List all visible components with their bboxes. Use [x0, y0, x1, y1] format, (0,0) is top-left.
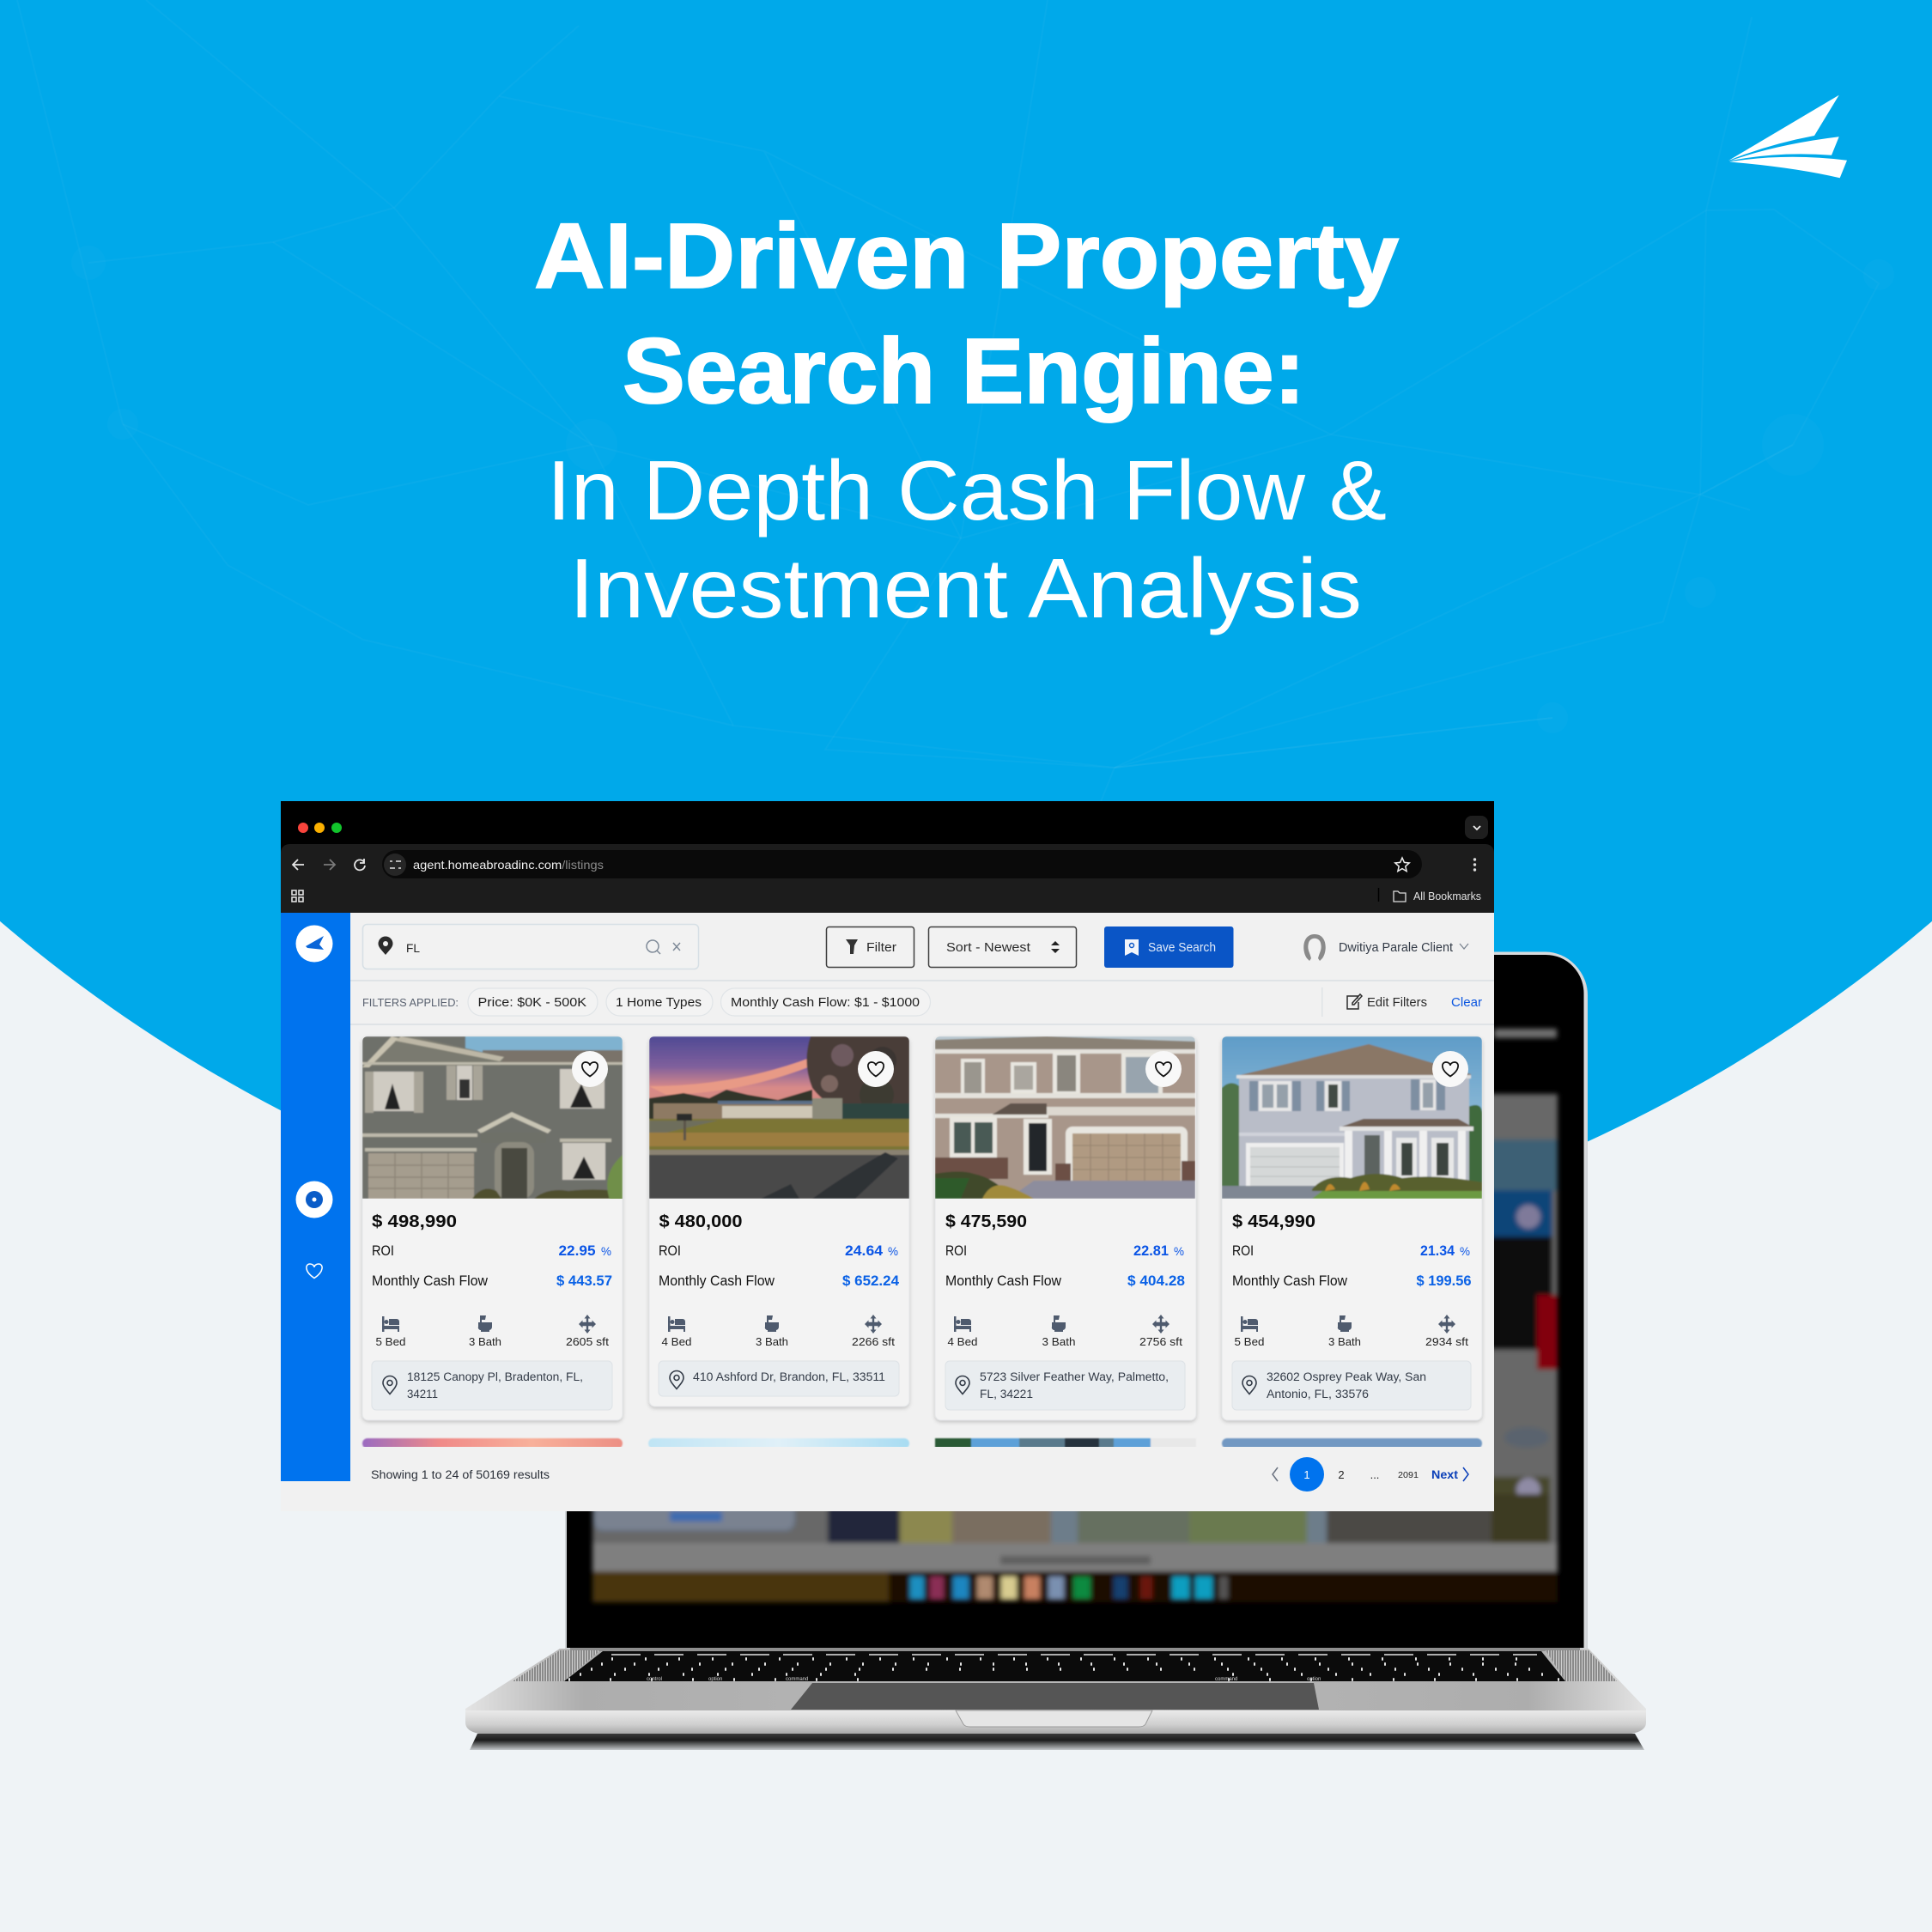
tab dropdown [1465, 816, 1488, 839]
card 1 monthly cash flow [372, 1273, 612, 1289]
laptop: speakers [513, 1650, 1617, 1681]
card 2 specs: 2266 sft [852, 1335, 895, 1348]
all bookmarks: All Bookmarks [1413, 890, 1481, 902]
card 2 favourite button [858, 1051, 894, 1087]
laptop: blurred screen content [592, 1029, 1558, 1602]
card 2 monthly cash flow: Monthly Cash Flow [659, 1273, 775, 1289]
sidebar: logo [295, 926, 333, 962]
filter chip: cash flow: Monthly Cash Flow: $1 - $1000 [731, 996, 920, 1010]
card 4 specs: 5 Bed [1235, 1335, 1264, 1348]
pagination: Next [1431, 1468, 1459, 1481]
laptop: front edge [465, 1710, 1646, 1734]
title: Search Engine: [623, 319, 1305, 422]
laptop: deck [465, 1649, 1646, 1714]
card 1 specs [376, 1315, 609, 1348]
pagination: ... [1370, 1468, 1379, 1481]
card 1 favourite button [572, 1051, 608, 1087]
filter chip: cash flow [721, 988, 931, 1016]
laptop: keyboard: command [1215, 1677, 1237, 1682]
laptop: trackpad [791, 1683, 1319, 1710]
card 3 specs: 2756 sft [1139, 1335, 1182, 1348]
card 2 price: $ 480,000 [659, 1212, 742, 1231]
browser window [281, 801, 1494, 1511]
card 3 monthly cash flow [945, 1273, 1185, 1289]
card 2 ROI: ROI [659, 1243, 681, 1259]
laptop: notch [956, 1710, 1152, 1727]
header divider [350, 980, 1494, 981]
filter button: Filter [866, 940, 896, 955]
laptop: keyboard: control [647, 1677, 662, 1682]
traffic lights [298, 823, 342, 833]
user menu [1303, 934, 1468, 961]
filter chip: home types [606, 988, 713, 1016]
card 2 specs [661, 1315, 895, 1348]
card 4 specs: 2934 sft [1425, 1335, 1468, 1348]
card 1 specs: 3 Bath [469, 1335, 501, 1348]
card 4 ROI: 21.34 [1420, 1243, 1455, 1259]
card 1 price: $ 498,990 [372, 1212, 457, 1231]
browser toolbar [281, 844, 1494, 913]
sort button [929, 927, 1077, 967]
card 4 monthly cash flow [1232, 1273, 1472, 1289]
card 2 photo: sunset bungalow [649, 1036, 909, 1199]
footer bar [281, 1447, 1494, 1511]
card 2 monthly cash flow: $ 652.24 [842, 1273, 900, 1289]
laptop: keyboard: command [786, 1677, 808, 1682]
card 4 favourite button [1432, 1051, 1468, 1087]
edit filters [1347, 994, 1427, 1010]
logo: paper plane [1728, 95, 1847, 178]
card 4 ROI: ROI [1232, 1243, 1254, 1259]
card 1 monthly cash flow: Monthly Cash Flow [372, 1273, 488, 1289]
title: In Depth Cash Flow & [547, 443, 1387, 538]
clear link: Clear [1451, 996, 1482, 1010]
card 3 photo: tan house with garage [935, 1036, 1195, 1199]
card 4 ROI [1232, 1243, 1470, 1259]
card 4 address [1232, 1361, 1471, 1410]
filter chip: price [468, 988, 598, 1016]
card 1 address: 18125 Canopy Pl, Bradenton, FL, [407, 1370, 583, 1383]
laptop: lid [566, 954, 1587, 1649]
laptop: base shadow [470, 1734, 1644, 1750]
card 3 monthly cash flow: Monthly Cash Flow [945, 1273, 1061, 1289]
laptop [465, 953, 1646, 1750]
background: blue dome [0, 0, 1932, 1278]
filter chip: home types: 1 Home Types [616, 996, 702, 1010]
card 1 photo: grey two-storey house [362, 1036, 623, 1200]
card 3 address: 5723 Silver Feather Way, Palmetto, [980, 1370, 1169, 1383]
card 3 monthly cash flow: $ 404.28 [1127, 1273, 1185, 1289]
user menu: Dwitiya Parale Client [1339, 941, 1453, 955]
card 1 address [372, 1361, 612, 1410]
card 2 specs: 4 Bed [661, 1335, 692, 1348]
filter chip: price: Price: $0K - 500K [477, 996, 586, 1010]
title: AI-Driven Property [534, 204, 1399, 307]
search box [362, 924, 699, 969]
card 1 ROI: % [601, 1244, 611, 1258]
sidebar: heart [307, 1264, 322, 1278]
card 1 specs: 5 Bed [376, 1335, 405, 1348]
results count: Showing 1 to 24 of 50169 results [371, 1468, 550, 1481]
card 3 favourite button [1145, 1051, 1182, 1087]
title: Investment Analysis [569, 541, 1362, 635]
card 3 ROI: % [1174, 1244, 1184, 1258]
laptop: keyboard: option [1307, 1677, 1321, 1682]
partial next row of listing images [362, 1438, 1482, 1449]
laptop: rear hinge strip [570, 1648, 1580, 1651]
listing card 2 [649, 1036, 909, 1406]
card 4 specs: 3 Bath [1328, 1335, 1361, 1348]
listing card 1 [362, 1036, 623, 1420]
card 3 price: $ 475,590 [945, 1212, 1027, 1231]
menu dots [1473, 858, 1476, 872]
card 3 ROI: ROI [945, 1243, 967, 1259]
nav arrows [293, 859, 365, 870]
filter button [826, 927, 914, 967]
card 1 specs: 2605 sft [566, 1335, 609, 1348]
card 1 ROI: 22.95 [558, 1243, 596, 1259]
all bookmarks [1379, 888, 1481, 902]
url bar [382, 850, 1422, 878]
card 3 address: FL, 34221 [980, 1388, 1033, 1400]
card 1 monthly cash flow: $ 443.57 [556, 1273, 612, 1289]
card 2 ROI: 24.64 [845, 1243, 884, 1259]
listing card 4 [1222, 1036, 1482, 1420]
window: app background [281, 913, 1494, 1511]
card 3 ROI [945, 1243, 1184, 1259]
card 1 address: 34211 [407, 1388, 438, 1400]
card 3 address [945, 1361, 1185, 1410]
card 4 monthly cash flow: Monthly Cash Flow [1232, 1273, 1347, 1289]
save search button: Save Search [1148, 941, 1216, 955]
laptop: keyboard: option [708, 1677, 722, 1682]
card 2 ROI: % [888, 1244, 898, 1258]
edit filters: Edit Filters [1367, 996, 1427, 1010]
card 1 ROI: ROI [372, 1243, 394, 1259]
sidebar [281, 913, 350, 1481]
card 4 photo: blue-grey house [1222, 1036, 1482, 1199]
sort button: Sort - Newest [946, 940, 1031, 955]
search box: FL [406, 941, 420, 955]
card 3 ROI: 22.81 [1133, 1243, 1169, 1259]
pagination: 2 [1338, 1468, 1345, 1481]
pagination: 2091 [1398, 1470, 1419, 1480]
card 1 ROI [372, 1243, 611, 1259]
card 3 specs [948, 1315, 1182, 1348]
card 2 monthly cash flow [659, 1273, 900, 1289]
filter row [362, 987, 1482, 1017]
card 4 price: $ 454,990 [1232, 1212, 1315, 1231]
card 2 address: 410 Ashford Dr, Brandon, FL, 33511 [693, 1370, 885, 1383]
background: network pattern [17, 0, 1879, 859]
card 4 address: Antonio, FL, 33576 [1267, 1388, 1369, 1400]
save search button [1104, 927, 1233, 968]
card 4 address: 32602 Osprey Peak Way, San [1267, 1370, 1426, 1383]
laptop: keyboard [564, 1651, 1565, 1682]
sidebar: search icon [295, 1182, 333, 1218]
pagination: 1 [1303, 1468, 1310, 1481]
filter row: FILTERS APPLIED: [362, 996, 459, 1009]
listing card 3 [935, 1036, 1196, 1420]
card 2 specs: 3 Bath [756, 1335, 788, 1348]
card 4 ROI: % [1460, 1244, 1470, 1258]
card 4 monthly cash flow: $ 199.56 [1417, 1273, 1472, 1289]
url bar: agent.homeabroadinc.com /listings [413, 858, 604, 872]
background: network nodes [71, 246, 1894, 733]
card 3 specs: 4 Bed [948, 1335, 977, 1348]
pagination [1273, 1457, 1468, 1492]
card 3 specs: 3 Bath [1042, 1335, 1075, 1348]
title [534, 204, 1399, 635]
card 2 address [659, 1361, 899, 1396]
card 4 specs [1235, 1315, 1468, 1348]
apps grid [292, 890, 303, 902]
card 2 ROI [659, 1243, 898, 1259]
window: tab bar [281, 801, 1494, 853]
